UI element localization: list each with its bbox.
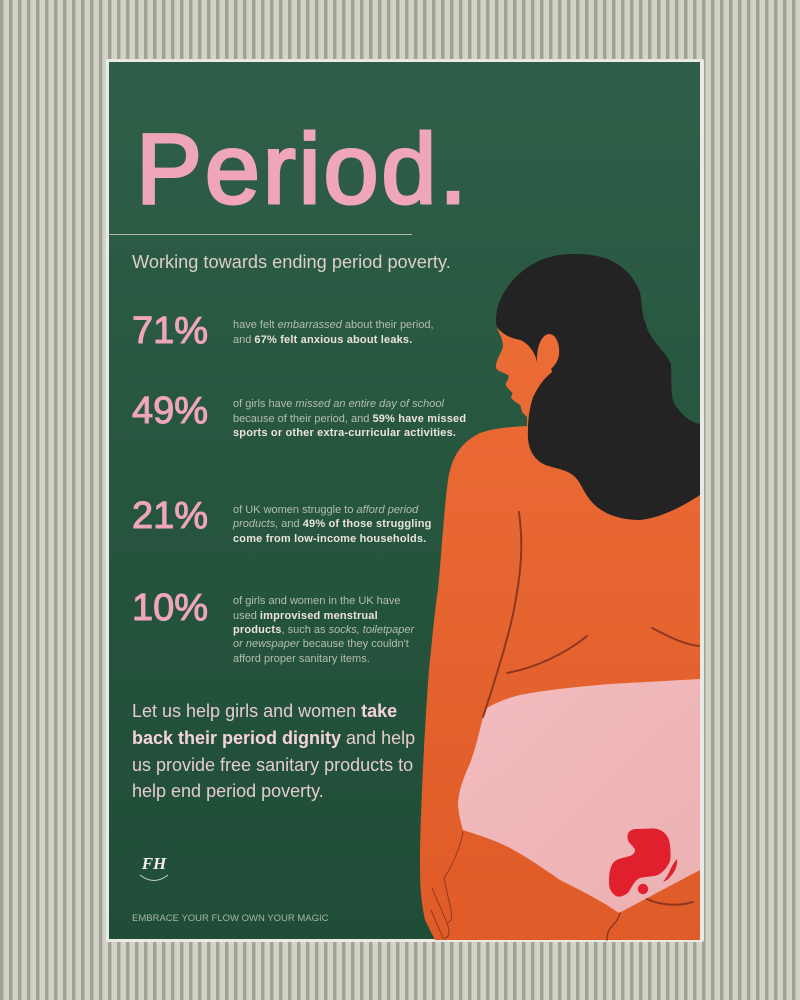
call to action paragraph: back their period dignity and help <box>132 728 415 748</box>
body <box>420 320 700 940</box>
statistic: 49%: because of their period, and 59% have missed <box>233 413 466 425</box>
poster background panel <box>109 62 700 939</box>
logo: FH smile <box>127 841 181 895</box>
illustration: woman from behind <box>420 254 700 940</box>
statistic: 49%: 49% <box>132 390 208 432</box>
call to action paragraph <box>132 701 415 801</box>
tagline: EMBRACE YOUR FLOW OWN YOUR MAGIC <box>132 913 329 924</box>
underwear <box>458 679 700 913</box>
statistic: 49%: of girls have missed an entire day of school <box>233 398 445 410</box>
body lines <box>431 512 699 940</box>
title: Period. <box>136 113 470 224</box>
statistic: 71%: 71% <box>132 310 208 352</box>
statistic: 21%: products, and 49% of those struggling <box>232 518 432 530</box>
call to action paragraph: help end period poverty. <box>132 781 324 801</box>
statistic: 10%: 10% <box>132 587 208 629</box>
statistic: 10%: products, such as socks, toiletpaper <box>233 624 416 636</box>
ear <box>537 334 559 372</box>
statistic: 21%: 21% <box>132 495 208 537</box>
logo: FH smile: FH <box>141 854 167 873</box>
statistic: 49% <box>132 390 466 439</box>
statistic: 21%: come from low-income households. <box>233 533 426 545</box>
statistic: 10%: or newspaper because they couldn't <box>233 638 409 650</box>
call to action paragraph: us provide free sanitary products to <box>132 755 413 775</box>
statistic: 21%: of UK women struggle to afford period <box>233 504 419 516</box>
statistic: 71%: and 67% felt anxious about leaks. <box>233 334 412 346</box>
statistic: 71%: have felt embarrassed about their period, <box>233 319 434 331</box>
hair <box>496 254 700 520</box>
call to action paragraph: Let us help girls and women take <box>132 701 397 721</box>
statistic: 10%: used improvised menstrual <box>233 610 378 622</box>
statistic: 10%: afford proper sanitary items. <box>233 653 370 665</box>
poster frame <box>106 59 704 942</box>
subtitle: Working towards ending period poverty. <box>132 252 451 272</box>
statistic: 21% <box>132 495 432 545</box>
statistic: 49%: sports or other extra-curricular activities. <box>233 427 456 439</box>
period stain <box>609 829 677 897</box>
statistic: 10% <box>132 587 416 665</box>
statistic: 10%: of girls and women in the UK have <box>233 595 401 607</box>
statistic: 71% <box>132 310 434 352</box>
